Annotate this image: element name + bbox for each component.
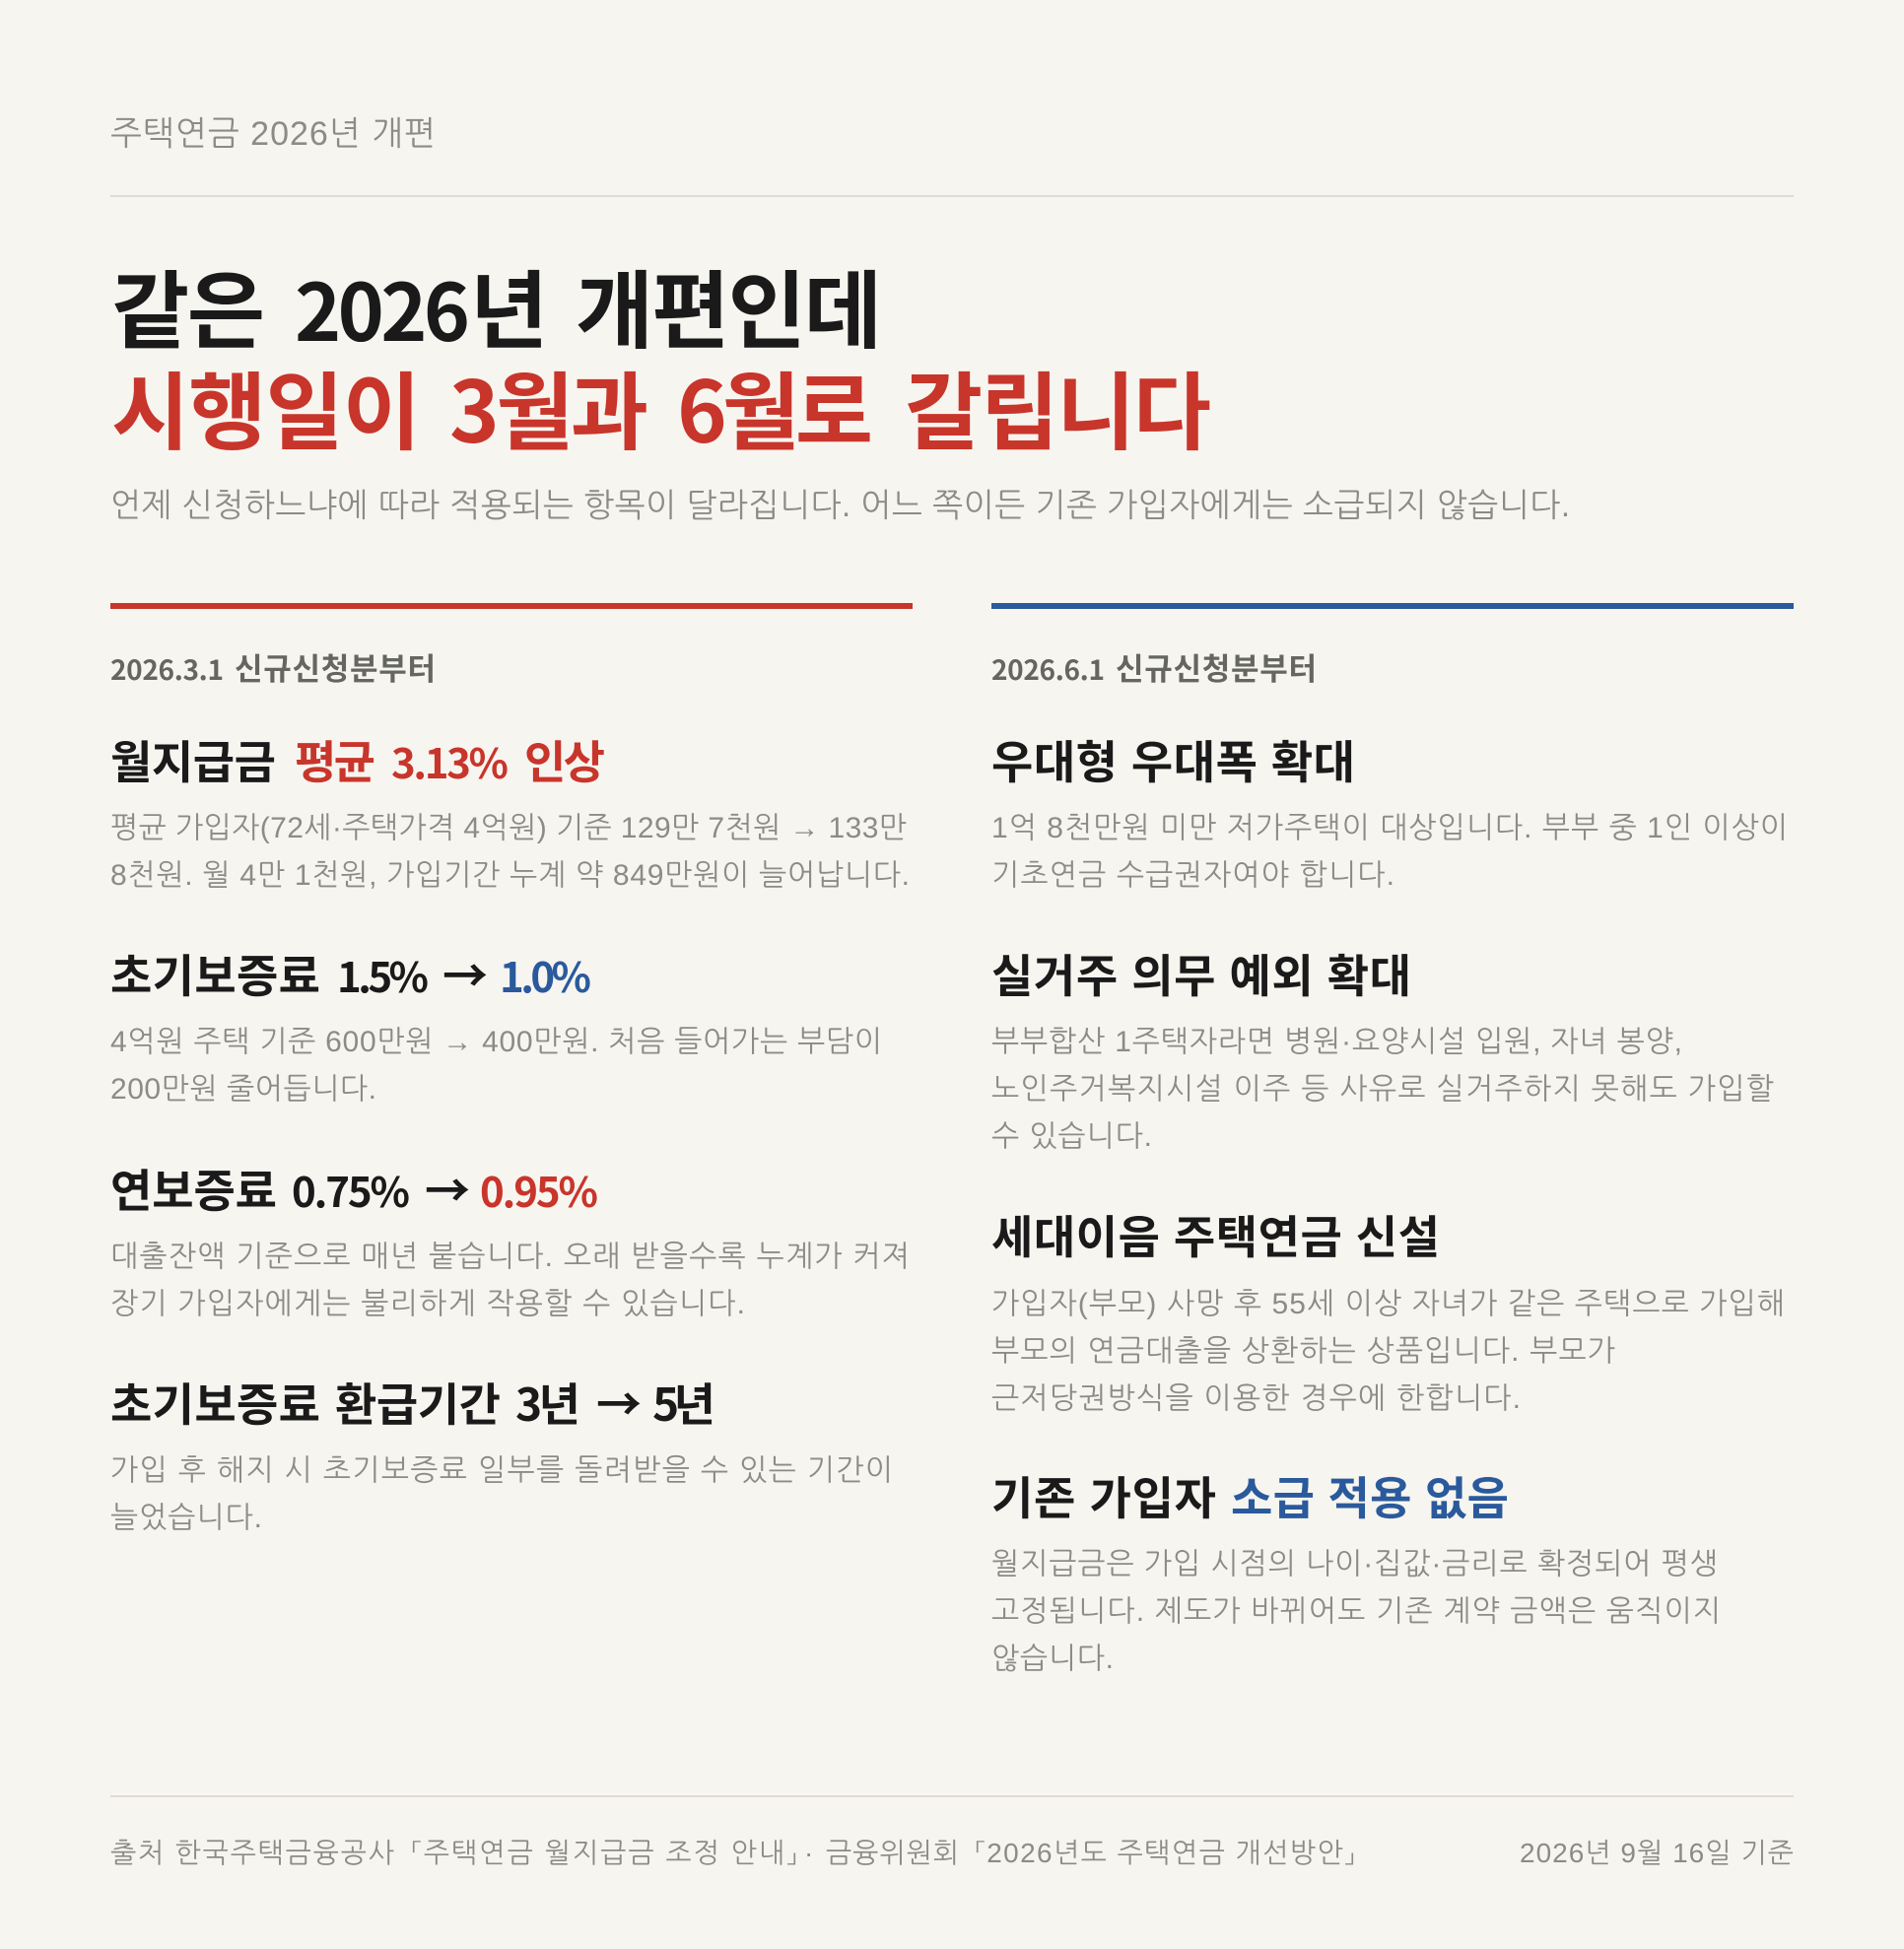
item heading: monthly payment: 평균 xyxy=(295,727,375,792)
column label: March: 신규신청분부터 xyxy=(235,644,436,689)
item heading: existing subscribers xyxy=(991,1463,1509,1528)
item heading: initial premium: 초기보증료 xyxy=(110,941,320,1006)
column label: March xyxy=(110,644,436,689)
item body: existing subscribers xyxy=(991,1548,1721,1675)
item heading: monthly payment xyxy=(110,727,605,792)
item body: annual premium xyxy=(110,1241,910,1320)
header kicker: 주택연금 2026년 개편 xyxy=(110,115,436,153)
item heading: annual premium: 0.95% xyxy=(480,1160,598,1220)
column bar: March xyxy=(110,603,913,609)
item heading: initial premium: 1.5% xyxy=(337,945,429,1005)
item body: annual premium: 대출잔액 기준으로 매년 붙습니다. 오래 받을수록 누계가 커져 xyxy=(110,1241,910,1273)
footer date: 2026년 9월 16일 기준 xyxy=(1520,1838,1794,1868)
item heading: annual premium: 0.75% xyxy=(292,1160,410,1220)
item body: existing subscribers: 월지급금은 가입 시점의 나이·집값·금리로 확정되어 평생 xyxy=(991,1548,1718,1580)
footer source: 「주택연금 월지급금 조정 안내」 xyxy=(412,1838,796,1868)
column label: March: 2026.3.1 xyxy=(110,649,224,689)
item body: initial premium: 200만원 줄어듭니다. xyxy=(110,1073,376,1106)
item body: refund period xyxy=(110,1454,893,1534)
title xyxy=(111,242,1211,467)
column label: June: 신규신청분부터 xyxy=(1116,644,1317,689)
item body: inheritance: 가입자(부모) 사망 후 55세 이상 자녀가 같은 주택으로 가입해 xyxy=(991,1288,1785,1320)
item heading: existing subscribers: 기존 가입자 xyxy=(991,1463,1216,1528)
item heading: existing subscribers: 소급 적용 없음 xyxy=(1231,1463,1509,1528)
footer source xyxy=(110,1838,1354,1868)
item heading: refund period xyxy=(110,1370,715,1435)
column label: June: 2026.6.1 xyxy=(991,649,1105,689)
item body: inheritance: 근저당권방식을 이용한 경우에 한합니다. xyxy=(991,1382,1521,1415)
item heading: refund period: 3년 xyxy=(515,1370,580,1435)
item heading: inheritance: 세대이음 주택연금 신설 xyxy=(991,1202,1440,1267)
item body: preferential xyxy=(991,812,1788,892)
item heading: monthly payment: 월지급금 xyxy=(110,727,276,792)
item heading: refund period: → xyxy=(596,1370,642,1435)
item body: residence: 노인주거복지시설 이주 등 사유로 실거주하지 못해도 가입할 xyxy=(991,1073,1774,1106)
item heading: refund period: 환급기간 xyxy=(335,1370,501,1435)
item heading: initial premium: 1.0% xyxy=(500,945,591,1005)
item body: refund period: 늘었습니다. xyxy=(110,1502,262,1534)
item body: existing subscribers: 고정됩니다. 제도가 바뀌어도 기존 계약 금액은 움직이지 xyxy=(991,1595,1721,1628)
item heading: monthly payment: 3.13% xyxy=(391,731,509,791)
item heading: refund period: 5년 xyxy=(652,1370,715,1435)
item heading: initial premium xyxy=(110,941,591,1006)
item body: monthly payment: 8천원. 월 4만 1천원, 가입기간 누계 약 849만원이 늘어납니다. xyxy=(110,859,910,892)
title: 6월로 xyxy=(677,344,873,467)
item body: residence xyxy=(991,1026,1774,1153)
item body: monthly payment xyxy=(110,812,910,892)
footer source: 「2026년도 주택연금 개선방안」 xyxy=(976,1838,1354,1868)
item body: residence: 부부합산 1주택자라면 병원·요양시설 입원, 자녀 봉양, xyxy=(991,1026,1682,1058)
item heading: refund period: 초기보증료 xyxy=(110,1370,320,1435)
item heading: residence: 실거주 의무 예외 확대 xyxy=(991,941,1411,1006)
footer source: · xyxy=(804,1838,813,1868)
item heading: annual premium xyxy=(110,1156,598,1221)
item body: preferential: 기초연금 수급권자여야 합니다. xyxy=(991,859,1394,892)
item heading: monthly payment: 인상 xyxy=(524,727,605,792)
item body: residence: 수 있습니다. xyxy=(991,1120,1152,1153)
item heading: annual premium: → xyxy=(425,1156,470,1221)
item heading: initial premium: → xyxy=(442,941,488,1006)
item body: refund period: 가입 후 해지 시 초기보증료 일부를 돌려받을 수 있는 기간이 xyxy=(110,1454,893,1487)
item body: monthly payment: 평균 가입자(72세·주택가격 4억원) 기준 129만 7천원 → 133만 xyxy=(110,812,907,844)
title: 년 xyxy=(470,242,548,366)
item heading: preferential: 우대형 우대폭 확대 xyxy=(991,727,1355,792)
footer source: 금융위원회 xyxy=(826,1838,959,1868)
title: 3월과 xyxy=(449,344,648,467)
title: 같은 xyxy=(111,242,265,366)
item heading: annual premium: 연보증료 xyxy=(110,1156,277,1221)
title: 갈립니다 xyxy=(905,344,1211,467)
title: 개편인데 xyxy=(576,242,882,366)
item body: annual premium: 장기 가입자에게는 불리하게 작용할 수 있습니다. xyxy=(110,1288,745,1320)
column label: June xyxy=(991,644,1317,689)
item body: initial premium xyxy=(110,1026,882,1106)
item body: initial premium: 4억원 주택 기준 600만원 → 400만원. 처음 들어가는 부담이 xyxy=(110,1026,882,1058)
footer source: 출처 한국주택금융공사 xyxy=(110,1838,395,1868)
title: 2026 xyxy=(295,250,470,365)
item body: inheritance xyxy=(991,1288,1785,1415)
item body: existing subscribers: 않습니다. xyxy=(991,1643,1114,1675)
column bar: June xyxy=(991,603,1794,609)
title: 시행일이 xyxy=(111,344,421,467)
item body: inheritance: 부모의 연금대출을 상환하는 상품입니다. 부모가 xyxy=(991,1335,1615,1368)
item body: preferential: 1억 8천만원 미만 저가주택이 대상입니다. 부부 중 1인 이상이 xyxy=(991,812,1788,844)
subtitle: 언제 신청하느냐에 따라 적용되는 항목이 달라집니다. 어느 쪽이든 기존 가입자에게는 소급되지 않습니다. xyxy=(110,487,1570,523)
